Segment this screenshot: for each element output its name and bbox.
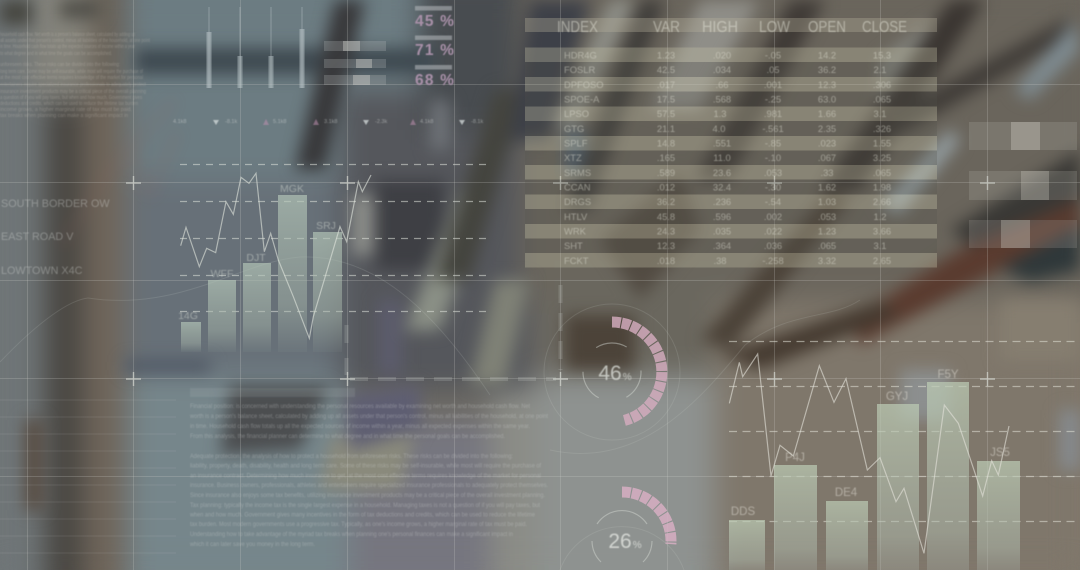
donut gauge 46%: [572, 322, 662, 420]
bar chart: right: DE4: [835, 487, 858, 499]
table data: .018: [657, 255, 675, 266]
table data: 2.65: [873, 255, 891, 266]
table data: 23.6: [713, 167, 731, 178]
table data: SHT: [564, 240, 583, 251]
text block: clipped article text upper left: entertainers require specialized insurance professionals to adequately protect: [0, 82, 147, 88]
table data: -.561: [762, 123, 784, 134]
left location labels: [1, 198, 110, 277]
article text block: Understanding how to take advantage of the myriad tax breaks when planning one's personal finances can make a significant impact in: [190, 531, 513, 538]
table data: .065: [873, 94, 891, 104]
table data: [564, 50, 891, 266]
table data: CCAN: [564, 182, 591, 192]
table row bands: [525, 48, 937, 268]
text block: clipped article text upper left: all assets under that person's control, minus all liabilities of the household, at one point: [0, 38, 150, 44]
bar chart: right: DDS: [731, 506, 755, 518]
table data: 4.0: [712, 123, 726, 134]
table data: .065: [873, 167, 891, 178]
table data: DRGS: [564, 196, 591, 207]
article text block: liability, property, death, disability, health and long term care. Some of these risks may be self-insurable, while most will require the purchase of: [190, 462, 541, 470]
table header: HIGH: [702, 19, 738, 36]
left location labels: SOUTH BORDER OW: [1, 198, 110, 210]
table data: 1.62: [818, 182, 836, 192]
table data: -.258: [762, 255, 784, 266]
table: [525, 18, 937, 268]
table data: 1.03: [818, 196, 836, 207]
table data: .568: [713, 94, 731, 104]
table data: .035: [713, 226, 731, 236]
article text block: worth is a person's balance sheet, calculated by adding up all assets under that person's control, minus all liabilities of the household, at one point: [189, 413, 548, 420]
bar chart: right: JS5: [990, 447, 1010, 459]
table data: .165: [657, 152, 675, 163]
table data: SPOE-A: [564, 94, 600, 104]
table data: .067: [818, 152, 836, 163]
table data: .023: [818, 138, 836, 148]
table data: .036: [764, 240, 782, 251]
text block: clipped article text upper left: insurance investment products may be a critical piece of the overall planning: [0, 89, 146, 95]
article text block: [189, 388, 548, 548]
table data: .020: [713, 50, 731, 60]
ticker row: 4.1k8: [173, 119, 186, 125]
ticker row: -8.1k: [471, 119, 483, 125]
text block: clipped article text upper left: deductions and credits, which can be used to reduce the lifetime tax burden: [0, 101, 138, 107]
table data: SRMS: [564, 167, 591, 178]
donut gauge 46%: 46%: [598, 362, 632, 385]
article text block: an insurance contract. Determining how much insurance to get, at the most cost effective terms requires knowledge of the market for personal: [190, 472, 541, 480]
table data: FCKT: [564, 255, 589, 266]
table data: 42.5: [657, 64, 675, 75]
left location labels: EAST ROAD V: [1, 231, 74, 243]
table data: 3.66: [873, 226, 891, 236]
article text block: Financial position: is concerned with understanding the personal resources available by examining net worth and household cash flow. Net: [190, 403, 530, 410]
bar chart: left: [178, 164, 560, 379]
bar chart: right: P4J: [785, 452, 805, 464]
table data: 14.8: [657, 138, 675, 148]
table data: .551: [713, 138, 731, 148]
article text block: which it can later save you money in the long term.: [189, 541, 315, 548]
table data: 2.35: [818, 123, 836, 134]
text block: clipped article text upper left: [0, 32, 150, 119]
article text block: in time. Household cash flow totals up all the expected sources of income within a year, minus all expected expenses within the same year.: [190, 423, 530, 430]
table data: 3.1: [873, 240, 887, 251]
bar chart: right: [729, 342, 1075, 570]
table data: 2.66: [873, 196, 891, 207]
table data: -.30: [765, 182, 781, 192]
table data: .034: [713, 64, 731, 75]
table data: .017: [657, 79, 675, 90]
table data: 57.5: [657, 108, 675, 119]
table data: .589: [657, 167, 675, 178]
table data: 3.25: [873, 152, 891, 163]
table data: .053: [818, 211, 836, 222]
bar chart: left: SRJ: [316, 220, 336, 232]
ticker row: 3.1k8: [324, 119, 337, 125]
table data: -.10: [765, 152, 781, 163]
table data: GTG: [564, 123, 584, 134]
bar chart: right: F5Y: [937, 369, 959, 381]
table header: CLOSE: [862, 19, 907, 36]
table data: HDR4G: [564, 50, 597, 60]
table data: LPSO: [564, 108, 589, 119]
percentage readouts: 68 %: [415, 72, 455, 89]
table data: .012: [657, 182, 675, 192]
text block: clipped article text upper left: unforeseen risks. These risks can be divided into the following:: [0, 62, 120, 68]
table data: .022: [764, 226, 782, 236]
ticker row: -2.3k: [375, 119, 387, 125]
table data: 1.2: [873, 211, 887, 222]
article text block: Tax planning: typically the income tax is the single largest expense in a household. Managing taxes is not a question of if you will pay taxes, but: [190, 502, 540, 509]
percentage readouts: 45 %: [415, 13, 455, 30]
table data: HTLV: [564, 211, 588, 222]
faint background curves: [0, 257, 860, 570]
ticker row: 5.1k8: [273, 119, 286, 125]
table data: .364: [713, 240, 731, 251]
table data: -.85: [765, 138, 781, 148]
table data: 24.3: [657, 226, 675, 236]
table data: 1.55: [873, 138, 891, 148]
left location labels: LOWTOWN X4C: [1, 265, 83, 277]
table data: 12.3: [818, 79, 836, 90]
text block: clipped article text upper left: in time. Household cash flow totals up the expected sources of income within a year: [0, 44, 135, 50]
table header: [525, 18, 937, 36]
text block: clipped article text upper left: tax breaks when planning can make a significant impact in: [0, 113, 128, 119]
ticker row: [173, 119, 483, 125]
table data: 1.23: [657, 50, 675, 60]
table data: 3.32: [818, 255, 836, 266]
table data: 17.5: [657, 94, 675, 104]
percentage readouts: 71 %: [415, 42, 455, 59]
text block: clipped article text upper left: long term care. Some may be self-insurable, while most will require the purchase of: [0, 69, 143, 75]
text block: clipped article text upper left: at the most cost effective terms requires knowledge of the market for personal: [0, 75, 143, 81]
table data: 12.3: [657, 240, 675, 251]
table data: 1.3: [713, 108, 727, 119]
table data: DPFOSO: [564, 79, 604, 90]
table header: LOW: [759, 19, 790, 36]
table header: VAR: [653, 19, 680, 36]
table data: .053: [764, 167, 782, 178]
table data: .38: [713, 255, 727, 266]
article text block: Since insurance also enjoys some tax benefits, utilizing insurance investment products may be a critical piece of the overall investment planning.: [190, 492, 545, 499]
table data: 11.0: [713, 152, 731, 163]
table data: .001: [764, 79, 782, 90]
table header: INDEX: [557, 19, 599, 36]
table data: .981: [764, 108, 782, 119]
table data: -.25: [765, 94, 781, 104]
table data: WRK: [564, 226, 587, 236]
table data: .065: [818, 240, 836, 251]
gauges: range bars right: [969, 122, 1077, 248]
table data: 36.2: [657, 196, 675, 207]
table data: .33: [820, 167, 834, 178]
bar chart: right: GYJ: [886, 391, 908, 403]
gauges: small range bars top: [324, 41, 386, 85]
donut gauge 26%: 26%: [608, 530, 642, 553]
table data: 36.2: [818, 64, 836, 75]
table data: SPLF: [564, 138, 588, 148]
table data: 14.2: [818, 50, 836, 60]
table data: 21.1: [657, 123, 675, 134]
table data: 2.1: [873, 64, 887, 75]
table data: 32.4: [713, 182, 731, 192]
table data: .236: [713, 196, 731, 207]
percentage readouts: [415, 6, 455, 89]
article text block: tax burden. Most modern governments use a progressive tax. Typically, as one's income grows, a higher marginal rate of tax must be paid.: [190, 521, 527, 528]
text block: clipped article text upper left: a question of if you will pay taxes, but when and how much. Government gives: [0, 95, 142, 101]
table data: 63.0: [818, 94, 836, 104]
ticker row: 4.1k8: [420, 119, 433, 125]
bar chart: left: WFF: [211, 268, 233, 280]
table data: .596: [713, 211, 731, 222]
chart: top candlestick bars: [206, 7, 304, 88]
table data: 1.66: [818, 108, 836, 119]
text block: clipped article text upper left: to what degree and in what time the goals can be accomplished.: [0, 51, 112, 57]
table data: .326: [873, 123, 891, 134]
table data: .306: [873, 79, 891, 90]
bar chart: left: MGK: [280, 183, 304, 195]
table data: 3.1: [873, 108, 887, 119]
ticker row: -8.1k: [225, 119, 237, 125]
table data: 1.23: [818, 226, 836, 236]
bar chart: left: DJT: [246, 252, 266, 264]
table data: XTZ: [564, 152, 582, 163]
table data: -.05: [765, 50, 781, 60]
text block: clipped article text upper left: income grows, a higher marginal rate of tax must be paid.: [0, 107, 132, 113]
article text block: insurance. Business owners, professionals, athletes and entertainers require specialized insurance professionals to adequately protect themselves.: [190, 482, 548, 489]
table data: 15.3: [873, 50, 891, 60]
table data: -.54: [765, 196, 781, 207]
table data: .05: [766, 64, 780, 75]
table data: 1.98: [873, 182, 891, 192]
table data: FOSLR: [564, 64, 595, 75]
table data: .002: [764, 211, 782, 222]
article text block: when and how much. Government gives many incentives in the form of tax deductions and credits, which can be used to reduce the lifetime: [189, 512, 535, 518]
text block: clipped article text upper left: household cash flow. Net worth is a person's balance sheet, calculated by adding up: [0, 32, 135, 38]
article text block: From this analysis, the financial planner can determine to what degree and in what time the personal goals can be accomplished.: [190, 433, 505, 440]
table data: 45.8: [657, 211, 675, 222]
bar chart: left: 14G: [178, 310, 198, 322]
article text block: Adequate protection: the analysis of how to protect a household from unforeseen risks. These risks can be divided into the following:: [190, 453, 513, 460]
table data: .66: [715, 79, 729, 90]
table header: OPEN: [808, 19, 846, 36]
donut gauge 26%: [592, 492, 671, 562]
